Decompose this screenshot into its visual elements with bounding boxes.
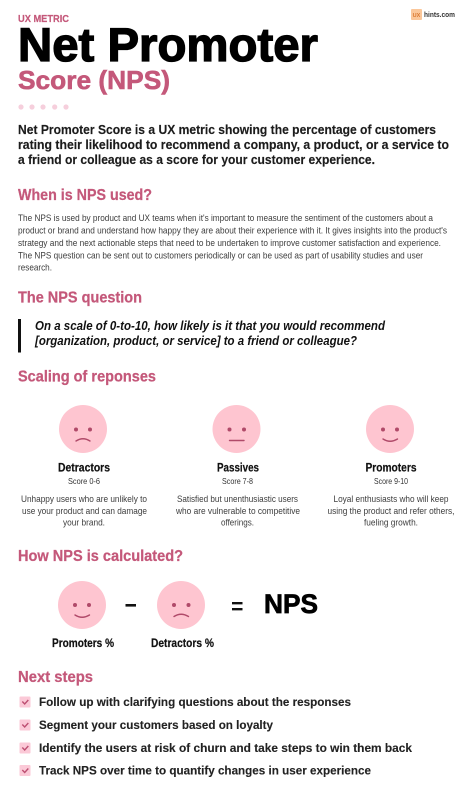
panel: promoters: Promoters xyxy=(366,463,416,475)
checklist: next steps xyxy=(20,695,412,778)
heading: When is NPS used?: When is NPS used? xyxy=(18,187,152,204)
heading: Scaling of reponses: Scaling of reponses xyxy=(18,369,156,386)
icon: promoters face xyxy=(58,581,106,629)
panel: passives: Passives xyxy=(217,463,259,475)
heading: The NPS question: The NPS question xyxy=(18,290,142,307)
panel: promoters: Loyal enthusiasts who will keep xyxy=(334,493,448,504)
heading: Next steps: Next steps xyxy=(18,669,93,686)
panel: detractors: Score 0-6 xyxy=(68,476,100,486)
panel: detractors: Unhappy users who are unlikely to xyxy=(21,493,147,504)
title: Net Promoter: Net Promoter xyxy=(18,18,318,71)
panel: passives: Score 7-8 xyxy=(222,476,253,486)
logo: uxhints.com: hints.com xyxy=(424,10,455,19)
intro text block: Net Promoter Score is a UX metric showing the percentage of customers xyxy=(18,122,436,137)
panel: detractors xyxy=(21,405,147,528)
panel: passives xyxy=(175,405,300,528)
formula: NPS calculation xyxy=(52,581,318,650)
icon: detractors face xyxy=(157,581,205,629)
text block: when NPS is used: The NPS question can be sent out to customers periodically or can be used as part of usability studies and user xyxy=(18,250,423,260)
item 4: Track NPS over time to quantify changes in user experience xyxy=(39,764,371,778)
quote: the NPS question xyxy=(18,319,385,352)
item 2: Segment your customers based on loyalty xyxy=(39,718,273,732)
intro text block: rating their likelihood to recommend a company, a product, or a service to xyxy=(18,137,449,152)
text block: when NPS is used: strategy and the next actionable steps that need to be undertaken to improve customer satisfaction and experience. xyxy=(18,238,441,248)
item 3: Identify the users at risk of churn and take steps to win them back xyxy=(39,741,412,755)
minus sign xyxy=(126,604,136,607)
label: Promoters %: Promoters % xyxy=(52,638,114,650)
panel: passives: who are vulnerable to competitive xyxy=(175,505,300,516)
icon: sad face xyxy=(59,405,107,453)
intro text block xyxy=(18,122,449,167)
result: NPS: NPS xyxy=(264,589,318,619)
panel: promoters: using the product and refer others, xyxy=(328,505,454,516)
panel: detractors: your brand. xyxy=(63,517,105,528)
logo: uxhints.com: UX xyxy=(413,13,421,19)
quote: the NPS question: On a scale of 0-to-10, how likely is it that you would recommend xyxy=(35,319,385,333)
panel: promoters: fueling growth. xyxy=(364,517,418,528)
panel: passives: offerings. xyxy=(221,517,254,528)
heading: How NPS is calculated?: How NPS is calculated? xyxy=(18,548,183,565)
icon: neutral face xyxy=(212,405,260,453)
label: Detractors %: Detractors % xyxy=(151,638,214,650)
quote: the NPS question: [organization, product, or service] to a friend or colleague? xyxy=(34,334,357,348)
panel: detractors: Detractors xyxy=(58,463,110,475)
icon: happy face xyxy=(366,405,414,453)
panel: passives: Satisfied but unenthusiastic users xyxy=(177,493,298,504)
equals sign xyxy=(232,602,242,610)
eyebrow: UX METRIC: UX METRIC xyxy=(18,13,69,25)
text block: when NPS is used xyxy=(18,213,447,273)
panel: promoters: Score 9-10 xyxy=(374,476,408,486)
panel: promoters xyxy=(328,405,454,528)
text block: when NPS is used: The NPS is used by product and UX teams when it's important to measure the sentiment of the customers about a xyxy=(18,213,434,223)
subtitle: Score (NPS): Score (NPS) xyxy=(18,65,170,95)
intro text block: a friend or colleague as a score for your customer experience. xyxy=(18,152,375,167)
decorative dots xyxy=(18,104,69,110)
logo: uxhints.com xyxy=(411,9,455,20)
text block: when NPS is used: research. xyxy=(18,263,52,273)
item 1: Follow up with clarifying questions about the responses xyxy=(39,695,351,709)
panel: detractors: use your product and can damage xyxy=(22,505,147,516)
